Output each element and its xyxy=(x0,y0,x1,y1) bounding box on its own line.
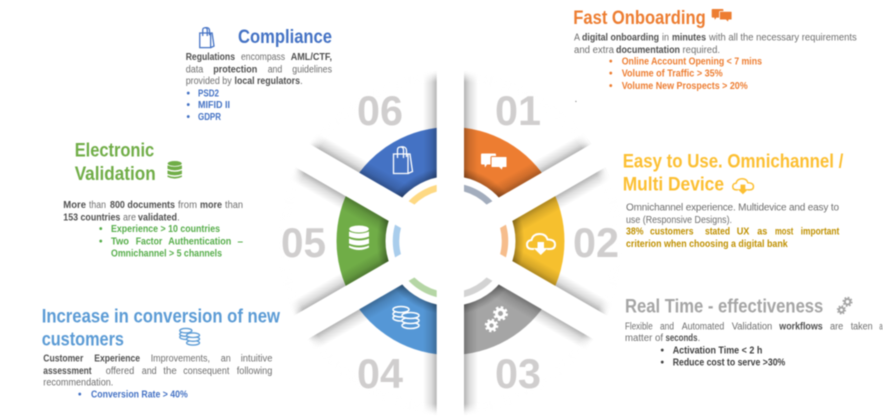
list: regulations: PSD2 xyxy=(198,89,219,100)
list: onboarding metrics: Volume of Traffic > 35% xyxy=(622,69,723,80)
icon: cloud outline xyxy=(733,179,753,194)
inner arc 01 xyxy=(450,186,498,214)
icon: grey gears xyxy=(838,297,852,314)
list: onboarding metrics: Online Account Opening < 7 mins xyxy=(622,56,762,68)
inner arc 03 xyxy=(450,268,498,296)
list: regulations: MIFID II xyxy=(198,100,230,111)
text: validation description: 800 documents xyxy=(110,200,175,211)
text: customer statistic xyxy=(626,227,840,250)
icon: gears xyxy=(486,307,507,331)
list: validation metrics: • xyxy=(99,224,103,235)
number 06: 06 xyxy=(357,87,403,134)
spoke shadows xyxy=(294,73,606,413)
list: validation metrics: Factor xyxy=(136,236,162,248)
sector 02: yellow xyxy=(450,184,564,298)
heading: Increase in conversion xyxy=(42,306,280,350)
text: compliance description: guidelines xyxy=(292,65,332,76)
number 04: 04 xyxy=(357,350,404,397)
text: onboarding description: digital onboarding xyxy=(582,33,659,44)
list: regulations: • xyxy=(186,100,190,111)
hexagonal wheel diagram xyxy=(282,72,618,414)
text: onboarding description: documentation xyxy=(616,45,680,56)
white spokes xyxy=(270,50,631,420)
list: onboarding metrics: • xyxy=(609,56,613,68)
text: conversion description: Experience xyxy=(94,353,140,364)
text: onboarding description: required. xyxy=(682,45,720,56)
list: regulations: GDPR xyxy=(198,112,222,123)
sector 03: grey xyxy=(450,241,549,355)
number 03: 03 xyxy=(495,350,541,397)
icon: database xyxy=(349,226,369,250)
heading: Increase in conversion: customers xyxy=(42,329,124,350)
list: validation metrics: – xyxy=(238,236,243,248)
number 01: 01 xyxy=(495,87,541,134)
list: regulations: • xyxy=(186,112,190,123)
text: validation description: More xyxy=(63,200,86,211)
heading: Easy to Use xyxy=(623,151,844,196)
text: conversion description: intuitive xyxy=(241,353,273,364)
panel: 01 fast onboarding xyxy=(573,8,857,105)
text: customer statistic: criterion when choosing a digital bank xyxy=(626,239,788,250)
list: validation metrics xyxy=(99,224,243,260)
text: omnichannel description: Omnichannel experience. Multidevice and easy to xyxy=(626,203,839,214)
text: workflow description: workflows xyxy=(778,322,823,333)
list: real time metrics: • xyxy=(660,345,664,356)
text: onboarding description: with all the necessary requirements xyxy=(708,33,857,44)
text: workflow description: seconds xyxy=(666,333,698,344)
text: workflow description: and xyxy=(660,322,674,333)
list: onboarding metrics: Volume New Prospects > 20% xyxy=(622,81,748,92)
text: workflow description: Validation xyxy=(732,322,772,333)
text: conversion description: recommendation. xyxy=(43,377,113,388)
text: compliance description: and xyxy=(268,65,282,76)
heading: Increase in conversion: Increase in conversion of new xyxy=(42,306,280,327)
text: conversion description: consequent xyxy=(183,366,229,377)
inner arc 04 xyxy=(403,268,450,296)
heading: Easy to Use: Easy to Use. Omnichannel / xyxy=(623,151,844,172)
text: conversion description: offered xyxy=(106,366,134,377)
icon: green database xyxy=(168,161,182,179)
list: real time metrics xyxy=(660,345,785,369)
stray period: . xyxy=(574,94,577,105)
text: compliance description: Regulations xyxy=(186,52,235,63)
panel: 06 compliance xyxy=(186,27,332,123)
text: omnichannel description xyxy=(626,203,839,226)
heading: Electronic Validation: Validation xyxy=(75,164,156,185)
sector 04: light blue xyxy=(352,241,450,355)
list: real time metrics: Reduce cost to serve >30% xyxy=(673,358,785,369)
text: onboarding description: in xyxy=(662,33,669,44)
text: validation description: than xyxy=(225,200,243,211)
text: compliance description: protection xyxy=(213,65,257,76)
text: compliance description: provided by xyxy=(186,76,232,87)
heading: Real Time: Real Time - effectiveness xyxy=(625,296,823,317)
list: validation metrics: Two xyxy=(111,236,129,248)
text: customer statistic: stated xyxy=(705,227,730,238)
centre disc xyxy=(386,176,516,306)
sector 05: green xyxy=(337,184,450,298)
text: conversion description: the xyxy=(163,366,177,377)
number 05: 05 xyxy=(281,219,326,266)
text: compliance description: data xyxy=(186,65,204,76)
list: validation metrics: • xyxy=(99,236,103,248)
icon: orange chat xyxy=(712,9,732,22)
text: onboarding description xyxy=(574,33,857,56)
panel: 03 real time xyxy=(625,296,883,369)
text: compliance description xyxy=(186,52,332,87)
list: regulations xyxy=(186,89,230,123)
icon: chat bubbles xyxy=(481,154,507,170)
text: workflow description xyxy=(625,322,883,344)
inner ring shadow xyxy=(376,167,524,315)
sector 06: dark blue xyxy=(352,127,450,241)
text: validation description: . xyxy=(177,212,180,224)
icon: cloud download xyxy=(527,234,555,255)
panel: 05 electronic validation xyxy=(63,141,243,260)
icon: blue coins xyxy=(180,328,200,345)
text: customer statistic: as xyxy=(757,227,768,238)
panel: 02 easy to use xyxy=(623,151,844,250)
text: conversion description xyxy=(43,353,273,388)
text: conversion description: and xyxy=(142,366,157,377)
list: real time metrics: • xyxy=(660,358,664,369)
inner arc 06 xyxy=(403,186,450,214)
text: conversion description: assessment xyxy=(43,366,92,377)
text: workflow description: . xyxy=(698,333,700,344)
text: conversion description: an xyxy=(221,353,231,364)
text: workflow description: matter of xyxy=(625,333,663,344)
text: validation description xyxy=(63,200,243,224)
text: compliance description: AML/CTF, xyxy=(291,52,332,63)
heading: Compliance: Compliance xyxy=(238,27,332,48)
text: validation description: than xyxy=(89,200,106,211)
text: workflow description: Automated xyxy=(682,322,724,333)
text: workflow description: taken xyxy=(851,322,873,333)
heading: Electronic Validation xyxy=(75,141,156,185)
text: compliance description: local regulators xyxy=(234,76,300,87)
text: workflow description: Flexible xyxy=(625,322,653,333)
icon: coins xyxy=(393,306,419,328)
text: compliance description: . xyxy=(300,76,303,87)
heading: Easy to Use: Multi Device xyxy=(623,175,724,196)
text: validation description: from xyxy=(178,200,197,211)
list: validation metrics: Authentication xyxy=(168,236,231,248)
text: conversion description: Improvements, xyxy=(151,353,210,364)
icon: shopping bag xyxy=(394,147,412,174)
text: onboarding description: and extra xyxy=(574,45,614,56)
text: omnichannel description: use (Responsive Designs). xyxy=(626,215,732,226)
list: validation metrics: Omnichannel > 5 channels xyxy=(111,249,222,260)
list: real time metrics: Activation Time < 2 h xyxy=(673,345,762,356)
icon: compliance bag xyxy=(200,28,214,48)
list: onboarding metrics: • xyxy=(609,81,613,92)
text: conversion description: Customer xyxy=(43,353,83,364)
heading: Fast Onboarding: Fast Onboarding xyxy=(573,8,706,29)
text: workflow description: are xyxy=(830,322,844,333)
text: customer statistic: important xyxy=(801,227,840,238)
text: customer statistic: 38% xyxy=(626,227,644,238)
text: validation description: validated xyxy=(138,212,177,224)
list: onboarding metrics xyxy=(609,56,762,92)
text: conversion description: following xyxy=(237,366,272,377)
text: customer statistic: UX xyxy=(737,227,750,238)
text: validation description: 153 countries xyxy=(63,212,121,224)
panel: 04 conversion increase xyxy=(42,306,280,400)
list: conversion rate: • xyxy=(78,389,82,400)
text: onboarding description: minutes xyxy=(672,33,706,44)
list: conversion rate: Conversion Rate > 40% xyxy=(91,389,188,400)
sector 01: orange xyxy=(450,127,549,241)
text: validation description: more xyxy=(200,200,222,211)
inner arc 02 xyxy=(498,214,505,268)
list: validation metrics: Experience > 10 countries xyxy=(111,224,220,235)
text: validation description: are xyxy=(123,212,136,224)
text: customer statistic: customers xyxy=(650,227,694,238)
list: regulations: • xyxy=(186,89,190,100)
inner arc 05 xyxy=(396,214,403,268)
text: customer statistic: most xyxy=(775,227,794,238)
number 02: 02 xyxy=(573,219,619,266)
text: onboarding description: A xyxy=(574,33,580,44)
heading: Electronic Validation: Electronic xyxy=(75,141,155,162)
arm end fade xyxy=(278,71,622,415)
text: compliance description: encompass xyxy=(241,52,285,63)
list: onboarding metrics: • xyxy=(609,69,613,80)
